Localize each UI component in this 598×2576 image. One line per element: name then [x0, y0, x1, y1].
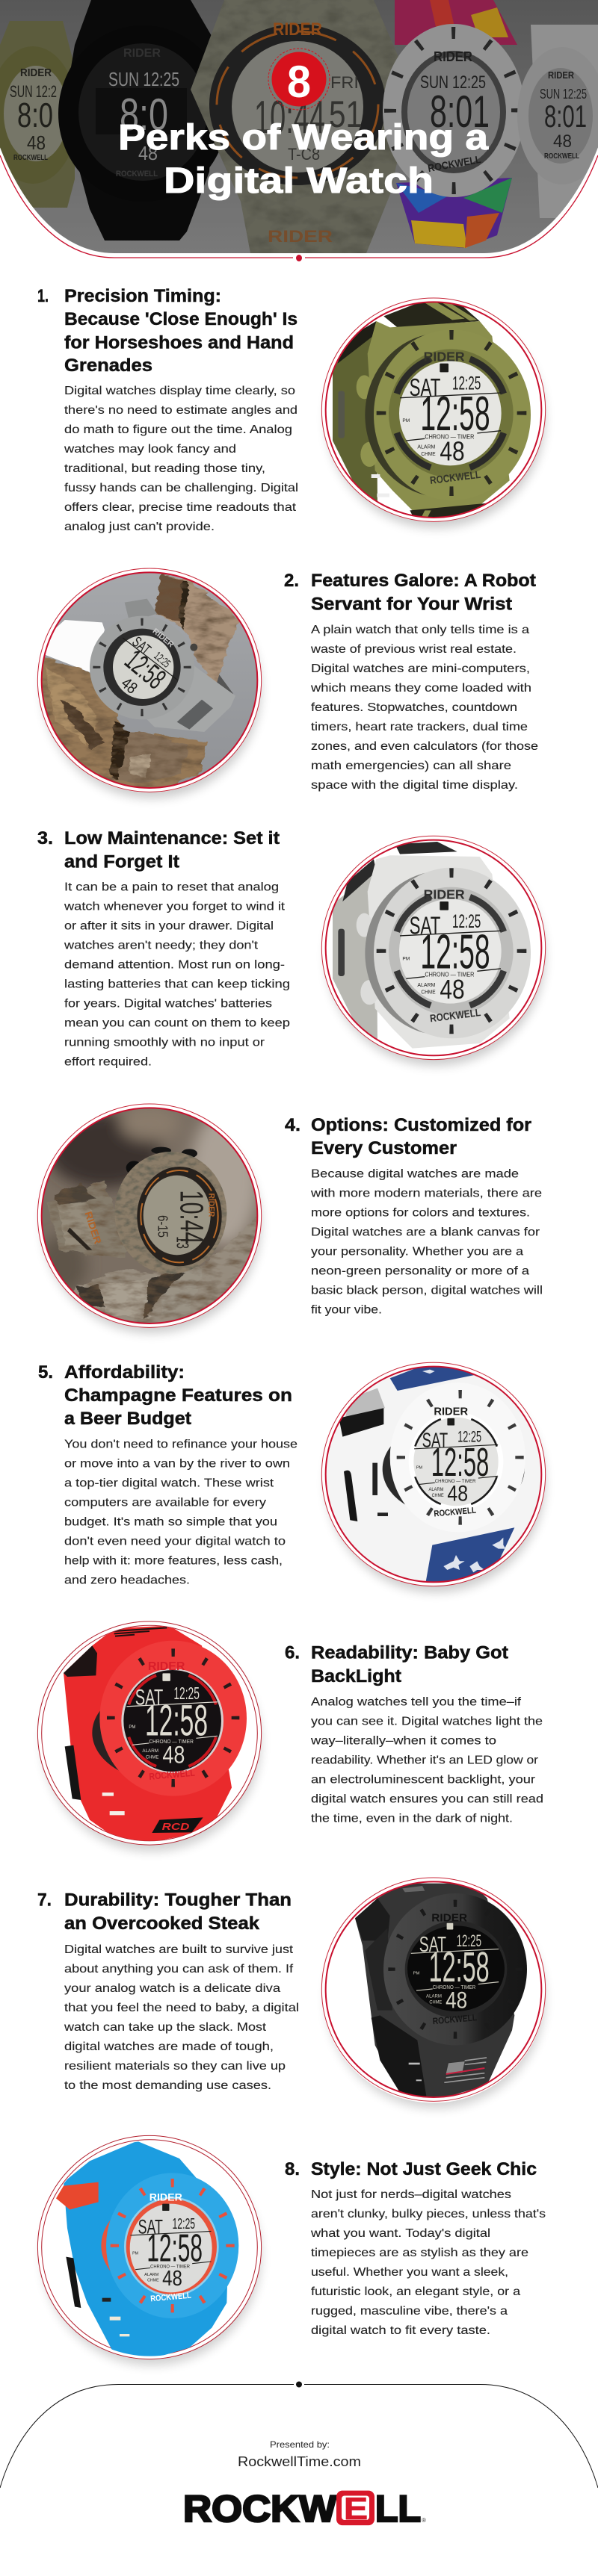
- camo watch: FRI: [330, 73, 359, 92]
- image: black watch: 48: [446, 1987, 467, 2013]
- image: black watch: [321, 1878, 546, 2108]
- footer curved outline: [0, 2384, 598, 2488]
- image: blue watch: CHME: [147, 2279, 159, 2283]
- Rockwell logo: ®: [422, 2517, 426, 2524]
- heading 1: [37, 286, 298, 376]
- image: olive watch: RIDER: [424, 349, 465, 364]
- body text 7: resilient materials so they can live up: [64, 2060, 286, 2073]
- white watch with tie-dye strap: 8:01: [430, 87, 490, 137]
- image: black watch: CHRONO — TIMER: [433, 1985, 475, 1990]
- heading 5: 5.: [38, 1362, 53, 1382]
- body text 1: fussy hands can be challenging. Digital: [64, 482, 298, 494]
- camo watch: T-C8: [288, 145, 320, 164]
- image: blue watch: 48: [162, 2267, 182, 2291]
- body text 4: fit your vibe.: [311, 1303, 382, 1316]
- white watch at right: 48: [553, 131, 572, 152]
- body text 2: which means they come loaded with: [310, 682, 531, 695]
- website: RockwellTime.com: [238, 2454, 361, 2469]
- body text 2: A plain watch that only tells time is a: [311, 624, 529, 636]
- body text 4: basic black person, digital watches will: [311, 1284, 543, 1297]
- image: black watch: RIDER: [431, 1911, 467, 1924]
- panel: 6 readability: [37, 1621, 543, 1852]
- white watch with tie-dye strap: SUN 12:25: [420, 72, 486, 93]
- image: blue watch: PM: [132, 2252, 138, 2256]
- tie-dye straps: [395, 0, 517, 248]
- body text 8: digital watch to fit every taste.: [311, 2324, 490, 2337]
- heading 3: 3.: [37, 828, 53, 848]
- body text 7: [64, 1943, 299, 2092]
- image: camo watch on log: 13: [173, 1236, 193, 1249]
- body text 2: math emergencies) can all share: [311, 760, 511, 772]
- body text 6: you can see it. Digital watches light the: [311, 1715, 543, 1728]
- panel: 3 low maintenance: [37, 828, 546, 1068]
- title: Perks of Wearing a: [118, 118, 488, 158]
- image: camo watch on log: RIDER: [206, 1194, 215, 1217]
- image: white watch: 48: [440, 974, 465, 1005]
- body text 1: offers clear, precise time readouts that: [64, 501, 297, 514]
- body text 1: analog just can't provide.: [64, 521, 215, 533]
- body text 7: watch can take up the slack. Most: [64, 2021, 267, 2034]
- body text 8: futuristic look, an elegant style, or a: [311, 2285, 520, 2298]
- olive watch: SUN 12:2: [10, 82, 57, 101]
- footer center dot: [296, 2381, 302, 2387]
- olive watch: ROCKWELL: [13, 154, 48, 162]
- image: white and flag watch: ALARM: [428, 1487, 443, 1492]
- title: Digital Watch: [164, 161, 434, 201]
- body text 3: mean you can count on them to keep: [64, 1017, 290, 1029]
- body text 6: readability. Whether it's an LED glow or: [311, 1754, 539, 1767]
- heading 5: [38, 1362, 292, 1429]
- body text 4: your personality. Whether you are a: [311, 1245, 523, 1258]
- image: red watch: RCD: [162, 1822, 189, 1832]
- body text 2: space with the digital time display.: [311, 779, 518, 792]
- Rockwell logo: ROCKW: [183, 2488, 337, 2530]
- body text 7: that you feel the need to baby, a digital: [64, 2002, 299, 2014]
- body text 8: rugged, masculine vibe, there's a: [311, 2305, 508, 2318]
- body text 8: what you want. Today's digital: [310, 2227, 490, 2240]
- image: white and flag watch: [321, 1362, 546, 1592]
- body text 4: neon-green personality or more of a: [311, 1264, 529, 1277]
- image: red watch: 12:25: [173, 1683, 200, 1703]
- image: gray watch on wood: 12:58: [119, 644, 171, 695]
- body text 5: don't even need your digital watch to: [64, 1536, 286, 1548]
- body text 1: Digital watches display time clearly, so: [64, 385, 295, 397]
- presented by: Presented by:: [270, 2439, 330, 2450]
- image: olive watch: 12:58: [420, 386, 490, 441]
- image: black watch: 12:25: [457, 1931, 481, 1950]
- heading 7: 7.: [37, 1890, 52, 1910]
- image: olive watch: [321, 298, 546, 528]
- image: red watch: ALARM: [142, 1748, 158, 1754]
- body text 7: about anything you can ask of them. If: [64, 1963, 294, 1976]
- olive watch: [0, 21, 78, 208]
- body text 6: the time, even in the dark of night.: [311, 1812, 513, 1825]
- body text 5: computers are available for every: [64, 1497, 266, 1509]
- body text 2: [310, 624, 538, 792]
- body text 7: to the most demanding use cases.: [64, 2079, 271, 2092]
- image: olive watch: ALARM: [417, 444, 435, 450]
- panel: header banner with watches: [0, 0, 598, 261]
- body text 8: [310, 2188, 546, 2337]
- body text 6: [310, 1695, 543, 1825]
- header watch photo collage: [0, 0, 598, 258]
- heading 1: Precision Timing:: [64, 286, 221, 306]
- heading 8: Style: Not Just Geek Chic: [311, 2159, 537, 2179]
- body text 3: lasting batteries that can keep ticking: [64, 978, 290, 990]
- image: gray watch on wood: [37, 568, 262, 798]
- image: white and flag watch: CHRONO — TIMER: [435, 1479, 476, 1484]
- body text 8: timepieces are as stylish as they are: [311, 2247, 528, 2259]
- image: red watch: CHRONO — TIMER: [149, 1738, 194, 1745]
- camo watch: RIDER: [268, 227, 333, 246]
- image: olive watch: ROCKWELL: [429, 468, 481, 486]
- black watch: SUN 12:25: [108, 68, 179, 90]
- heading 1: Because 'Close Enough' Is: [64, 309, 298, 329]
- body text 1: traditional, but reading those tiny,: [64, 462, 265, 475]
- number badge: 8: [287, 57, 311, 107]
- heading 5: a Beer Budget: [64, 1409, 191, 1429]
- body text 1: [64, 385, 298, 533]
- body text 5: [64, 1438, 298, 1587]
- heading 4: Every Customer: [311, 1138, 457, 1158]
- panel: 1 precision timing: [37, 286, 546, 533]
- image: white watch: ROCKWELL: [429, 1006, 481, 1024]
- Rockwell logo: LL: [375, 2488, 421, 2530]
- image: white and flag watch: 48: [447, 1482, 468, 1506]
- Rockwell logo: [183, 2488, 426, 2530]
- body text 3: watch whenever you forget to wind it: [64, 901, 286, 913]
- body text 4: Digital watches are a blank canvas for: [311, 1226, 540, 1238]
- body text 6: Analog watches tell you the time–if: [311, 1695, 522, 1709]
- image: olive watch: CHRONO — TIMER: [425, 433, 475, 440]
- image: white and flag watch: CHME: [432, 1493, 444, 1498]
- olive watch: 8:0: [17, 96, 53, 134]
- white watch with tie-dye strap: [383, 24, 525, 197]
- heading 6: BackLight: [311, 1666, 401, 1686]
- header center dot: [296, 255, 302, 261]
- heading 1: Grenades: [64, 356, 152, 376]
- camo watch: RIDER: [273, 19, 322, 40]
- heading 6: 6.: [285, 1643, 300, 1663]
- image: blue watch: ROCKWELL: [150, 2291, 191, 2303]
- body text 6: way–literally–when it comes to: [310, 1734, 496, 1748]
- image: camo watch on log: 6-15: [155, 1215, 171, 1238]
- body text 8: aren't clunky, bulky pieces, unless that's: [311, 2208, 546, 2220]
- olive watch: RIDER: [20, 66, 52, 79]
- image: olive watch: 12:25: [452, 373, 481, 394]
- body text 5: and zero headaches.: [64, 1574, 190, 1587]
- camo watch: [191, 0, 413, 253]
- body text 4: more options for colors and textures.: [311, 1206, 530, 1219]
- body text 3: for years. Digital watches' batteries: [64, 998, 272, 1010]
- header curved red outline: [0, 155, 598, 258]
- body text 4: [310, 1167, 543, 1316]
- image: blue watch: ALARM: [144, 2273, 158, 2277]
- body text 5: a top-tier digital watch. These wrist: [64, 1477, 274, 1490]
- image: white and flag watch: 12:58: [431, 1440, 489, 1485]
- image: camo watch on log: 10:44: [173, 1191, 209, 1244]
- image: red watch: SAT: [135, 1685, 163, 1710]
- body text 8: Not just for nerds–digital watches: [311, 2188, 511, 2201]
- body text 3: effort required.: [64, 1056, 152, 1068]
- image: gray watch on wood: SAT: [129, 634, 154, 658]
- heading 2: Servant for Your Wrist: [311, 594, 512, 614]
- image: white watch: 12:58: [420, 924, 490, 978]
- body text 4: Because digital watches are made: [311, 1167, 519, 1180]
- image: white watch: ALARM: [417, 981, 435, 988]
- image: white watch: 12:25: [452, 911, 481, 932]
- image: olive watch: 48: [440, 436, 465, 467]
- image: red watch: CHME: [146, 1754, 159, 1760]
- body text 5: help with it: more features, less cash,: [64, 1555, 283, 1568]
- camo watch: 10:44: [254, 92, 325, 143]
- white watch at right: [517, 25, 598, 218]
- olive watch: 48: [27, 131, 46, 154]
- image: white watch: CHRONO — TIMER: [425, 972, 475, 978]
- black watch: ROCKWELL: [116, 170, 158, 179]
- black watch: 48: [138, 142, 158, 164]
- image: white and flag watch: ROCKWELL: [434, 1506, 477, 1519]
- image: black watch: SAT: [419, 1933, 446, 1957]
- image: olive watch: PM: [402, 418, 410, 423]
- body text 1: there's no need to estimate angles and: [64, 404, 298, 417]
- body text 3: It can be a pain to reset that analog: [64, 881, 279, 893]
- white watch at right: RIDER: [548, 69, 575, 81]
- image: olive watch: CHME: [421, 450, 436, 457]
- body text 5: budget. It's math so simple that you: [64, 1516, 277, 1529]
- black watch: 8:0: [120, 90, 168, 140]
- body text 1: do math to figure out the time. Analog: [64, 423, 292, 436]
- image: black watch: 12:58: [429, 1943, 490, 1990]
- image: red watch: 48: [162, 1741, 185, 1768]
- panel: 8 style: [37, 2135, 546, 2365]
- heading 4: Options: Customized for: [311, 1115, 531, 1135]
- heading 5: Affordability:: [64, 1362, 185, 1382]
- body text 3: demand attention. Most run on long-: [64, 959, 285, 971]
- heading 3: [37, 828, 280, 872]
- image: black watch: ROCKWELL: [432, 2012, 478, 2026]
- image: white watch: RIDER: [424, 887, 465, 902]
- image: red watch: 12:58: [145, 1697, 208, 1745]
- image: white watch: CHME: [421, 988, 436, 995]
- camo watch: 51: [329, 93, 363, 135]
- heading 6: Readability: Baby Got: [311, 1643, 508, 1663]
- image: olive watch: SAT: [410, 374, 440, 402]
- body text 2: Digital watches are mini-computers,: [311, 662, 530, 675]
- image: black watch: PM: [413, 1971, 420, 1976]
- heading 7: an Overcooked Steak: [64, 1914, 260, 1934]
- heading 2: 2.: [284, 571, 299, 591]
- body text 6: an electroluminescent backlight, your: [311, 1773, 536, 1787]
- heading 3: and Forget It: [64, 851, 179, 872]
- heading 3: Low Maintenance: Set it: [64, 828, 280, 848]
- white watch with tie-dye strap: ROCKWELL: [427, 153, 482, 174]
- body text 8: useful. Whether you want a sleek,: [311, 2266, 508, 2279]
- heading 7: [37, 1890, 292, 1934]
- black watch: [58, 0, 227, 240]
- heading 8: 8.: [285, 2159, 300, 2179]
- image: gray watch on wood: 12:25: [152, 650, 173, 671]
- body text 7: your analog watch is a delicate diva: [64, 1982, 280, 1995]
- body text 2: zones, and even calculators (for those: [311, 740, 538, 753]
- image: white and flag watch: SAT: [422, 1429, 448, 1452]
- heading 2: Features Galore: A Robot: [311, 571, 536, 591]
- image: white and flag watch: 12:25: [457, 1429, 481, 1446]
- body text 5: You don't need to refinance your house: [64, 1438, 298, 1451]
- body text 3: or after it sits in your drawer. Digital: [64, 920, 274, 932]
- heading 1: 1.: [37, 286, 49, 306]
- image: red watch: ROCKWELL: [149, 1768, 196, 1782]
- body text 3: [64, 881, 290, 1068]
- number badge: [268, 49, 330, 110]
- body text 2: timers, heart rate trackers, dual time: [311, 721, 528, 733]
- panel: 7 durability: [37, 1878, 546, 2108]
- image: blue watch: SAT: [138, 2216, 163, 2238]
- image: camo watch on log: [37, 1103, 262, 1333]
- heading 5: Champagne Features on: [64, 1385, 292, 1406]
- heading 6: [285, 1643, 508, 1686]
- body text 2: features. Stopwatches, countdown: [311, 701, 517, 714]
- panel: 4 options: [37, 1103, 543, 1333]
- heading 4: [285, 1115, 531, 1158]
- image: white watch: [321, 836, 546, 1066]
- heading 2: [284, 571, 536, 614]
- heading 7: Durability: Tougher Than: [64, 1890, 292, 1910]
- image: blue watch: CHRONO — TIMER: [150, 2265, 190, 2270]
- heading 4: 4.: [285, 1115, 300, 1135]
- panel: footer: [0, 2381, 598, 2530]
- image: gray watch on wood: 48: [118, 674, 141, 698]
- white watch at right: ROCKWELL: [544, 152, 579, 161]
- image: blue watch: RIDER: [150, 2191, 182, 2203]
- black watch: RIDER: [123, 47, 161, 60]
- image: black watch: CHME: [429, 2000, 442, 2005]
- panel: 5 affordability: [38, 1362, 546, 1592]
- image: black watch: ALARM: [426, 1994, 442, 1999]
- body text 4: with more modern materials, there are: [310, 1187, 542, 1199]
- image: gray watch on wood: RIDER: [151, 627, 175, 650]
- title: [118, 118, 488, 201]
- body text 7: digital watches are made of tough,: [64, 2040, 274, 2053]
- image: blue watch: 12:58: [147, 2226, 203, 2270]
- body text 7: Digital watches are built to survive just: [64, 1943, 294, 1956]
- panel: 2 features galore: [37, 568, 538, 798]
- image: red watch: [37, 1621, 262, 1852]
- heading 1: for Horseshoes and Hand: [64, 333, 294, 353]
- body text 3: watches aren't needy; they don't: [64, 940, 259, 952]
- white watch with tie-dye strap: RIDER: [434, 49, 472, 64]
- image: white and flag watch: PM: [416, 1466, 423, 1471]
- image: white watch: SAT: [410, 912, 440, 940]
- Rockwell logo: E: [344, 2491, 368, 2526]
- body text 6: digital watch ensures you can still read: [311, 1793, 543, 1806]
- image: white and flag watch: RIDER: [434, 1406, 469, 1418]
- image: red watch: RIDER: [148, 1660, 185, 1673]
- image: blue watch: [37, 2135, 262, 2365]
- image: camo watch on log: RIDER: [82, 1210, 104, 1246]
- image: red watch: PM: [129, 1725, 135, 1730]
- image: blue watch: 12:25: [172, 2216, 195, 2232]
- body text 5: or move into a van by the river to own: [64, 1458, 290, 1471]
- body text 3: running smoothly with no input or: [64, 1037, 265, 1049]
- body text 1: watches may look fancy and: [64, 443, 236, 456]
- body text 2: waste of previous wrist real estate.: [310, 643, 517, 656]
- image: white watch: PM: [402, 956, 410, 961]
